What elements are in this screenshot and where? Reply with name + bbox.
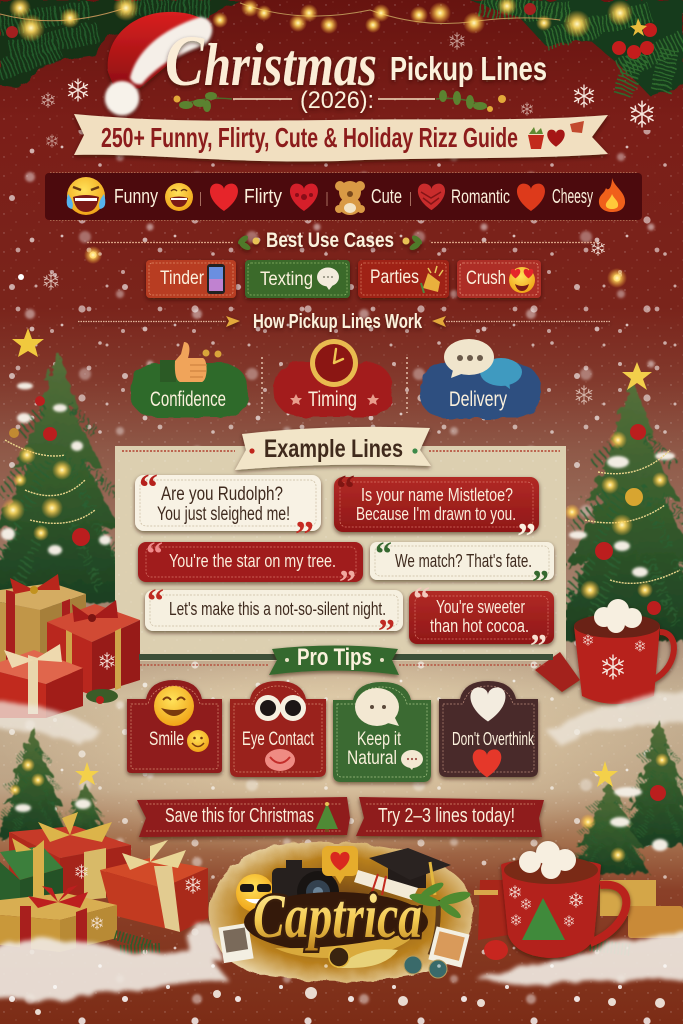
icon: party bell xyxy=(421,266,443,293)
quote card 3: ” xyxy=(339,564,356,601)
icon: eyes xyxy=(255,695,306,721)
gift: gold box xyxy=(0,885,117,952)
ribbon: pro tips heading: Pro Tips xyxy=(297,644,372,671)
ribbon: example lines heading xyxy=(235,427,431,470)
small trees: left xyxy=(0,726,108,842)
gifts: middle left xyxy=(0,574,140,718)
quote card 3: “ xyxy=(146,536,163,573)
ribbon: pro tips heading xyxy=(269,644,399,675)
quote card 2: Is your name Mistletoe? xyxy=(361,485,513,505)
label: flirty: Flirty xyxy=(244,186,282,208)
icon: small chat bubble xyxy=(401,750,423,770)
heading: best use cases: Best Use Cases xyxy=(266,229,394,252)
heading: best use cases xyxy=(87,229,597,252)
icon: diploma xyxy=(354,870,418,900)
quote card 1: Are you Rudolph? xyxy=(161,484,283,505)
snow: bottom xyxy=(0,920,683,1001)
gift: red box xyxy=(47,600,140,695)
button: parties: Parties xyxy=(370,267,419,288)
icon: teddy bear xyxy=(335,181,365,215)
mug: middle right xyxy=(535,599,674,704)
button: crush: Crush xyxy=(466,268,506,289)
icon: tree star xyxy=(75,762,99,785)
gift: front red box xyxy=(0,644,83,718)
quote card 6: You're sweeter xyxy=(436,597,525,617)
icon: small smiley xyxy=(187,730,209,752)
gift: gold box xyxy=(0,574,86,665)
logo: captrica xyxy=(210,842,473,981)
icon: tree star xyxy=(12,328,44,357)
icon: grin xyxy=(165,183,193,211)
tip: smile: Smile xyxy=(149,729,184,750)
label: funny: Funny xyxy=(114,186,158,208)
garland: top left xyxy=(0,0,240,88)
quote card 2: “ xyxy=(336,468,355,510)
label: timing: Timing xyxy=(308,388,357,411)
tip: don't overthink: Don't Overthink xyxy=(452,729,535,749)
panel: timing xyxy=(274,339,393,417)
snow drifts: middle xyxy=(0,690,683,745)
category bar xyxy=(45,172,642,220)
heading: how pickup lines work: How Pickup Lines Work xyxy=(253,311,423,333)
icon: palm tree xyxy=(408,880,472,955)
panel: example lines xyxy=(115,427,566,665)
call to action ribbons xyxy=(137,797,544,837)
button: crush xyxy=(457,260,541,298)
icon: sunglasses xyxy=(404,956,447,978)
ribbon: try lines xyxy=(356,797,544,837)
quote card 2: Because I'm drawn to you. xyxy=(356,504,516,524)
icon: mini tree xyxy=(316,802,338,832)
quote card 2: ” xyxy=(517,516,536,558)
tip: keep it natural: Natural xyxy=(347,748,397,769)
icon: tree star xyxy=(622,362,652,390)
gift: red box xyxy=(9,812,131,900)
ribbon: try lines: Try 2–3 lines today! xyxy=(378,805,515,827)
icon: mug tree xyxy=(522,898,565,940)
title: Christmas xyxy=(165,21,377,101)
label: romantic: Romantic xyxy=(451,187,510,208)
tip: don't overthink xyxy=(439,681,538,777)
icon: lips xyxy=(265,749,295,771)
small trees: right xyxy=(570,720,683,874)
icon: photo left xyxy=(218,923,254,963)
strawberry xyxy=(484,940,508,960)
quote card 3 xyxy=(138,536,363,601)
quote card 3: You're the star on my tree. xyxy=(169,551,336,571)
icon: heart-eyes face xyxy=(509,267,535,293)
title xyxy=(165,21,547,114)
button: tinder: Tinder xyxy=(160,268,205,289)
title sprigs xyxy=(174,90,506,112)
quote card 4: We match? That's fate. xyxy=(395,551,532,571)
icon: speech bubbles xyxy=(444,339,522,389)
button: tinder xyxy=(146,260,236,298)
how it works: dividers xyxy=(262,357,407,413)
icon: swoosh xyxy=(275,930,420,958)
use case buttons xyxy=(146,260,541,298)
quote card 6: ” xyxy=(530,628,547,665)
quote card 5 xyxy=(145,583,403,650)
icon: knitted heart xyxy=(418,184,445,210)
gifts: bottom right xyxy=(474,880,683,950)
icon: photo right xyxy=(428,926,470,968)
ribbon: example lines heading: Example Lines xyxy=(264,435,403,463)
panel: confidence xyxy=(130,342,248,418)
icon: chat bubble xyxy=(317,268,339,290)
title: (2026): xyxy=(300,87,374,114)
tip: smile xyxy=(127,680,222,773)
string lights xyxy=(212,0,560,34)
title: Pickup Lines xyxy=(390,50,547,87)
gifts: bottom left xyxy=(0,812,208,952)
icon: tree star xyxy=(592,761,618,787)
panel: delivery xyxy=(419,339,541,418)
icon: thumbs up xyxy=(160,342,222,382)
icon: heart speech bubble xyxy=(322,846,358,884)
tip: eye contact xyxy=(230,681,326,777)
icon: sunglasses emoji xyxy=(236,874,274,912)
gift: green box xyxy=(0,838,63,902)
button: parties xyxy=(358,260,449,298)
icon: patterned heart xyxy=(290,184,318,211)
quote card 6: “ xyxy=(413,581,430,618)
quote card 6: than hot cocoa. xyxy=(430,616,529,636)
logo wordmark: Captrica xyxy=(253,883,422,951)
quote card 4 xyxy=(370,536,554,601)
panel: delivery: Delivery xyxy=(449,388,507,411)
icon: red heart xyxy=(473,749,501,777)
icon: camera xyxy=(272,860,339,913)
tip: eye contact: Eye Contact xyxy=(242,729,315,750)
tip: keep it natural xyxy=(333,682,431,782)
icon: banner gifts xyxy=(528,121,584,149)
icon: laughing face xyxy=(67,177,105,215)
quote card 1: “ xyxy=(139,467,158,509)
santa hat xyxy=(105,12,212,115)
ribbon: save this xyxy=(137,797,350,837)
quote card 4: “ xyxy=(375,536,392,573)
big tree: left xyxy=(0,328,134,603)
mug: bottom right xyxy=(501,841,626,958)
quote card 6 xyxy=(409,581,554,665)
icon: phone xyxy=(207,264,225,294)
icon: feather xyxy=(337,949,398,968)
quote card 5: ” xyxy=(378,613,395,650)
label: cute: Cute xyxy=(371,186,402,208)
ribbon: save this: Save this for Christmas xyxy=(165,805,314,827)
button: texting: Texting xyxy=(260,269,313,290)
label: cheesy: Cheesy xyxy=(552,186,593,208)
quote card 5: Let's make this a not-so-silent night. xyxy=(169,599,386,619)
button: texting xyxy=(245,260,350,298)
panel: confidence: Confidence xyxy=(150,388,226,411)
quote card 1 xyxy=(135,467,321,556)
quote card 5: “ xyxy=(147,583,164,620)
icon: clock xyxy=(310,339,358,387)
band: pro tips xyxy=(139,644,553,675)
tip: keep it natural: Keep it xyxy=(357,729,402,750)
wordmark backing xyxy=(244,892,428,952)
quote card 1: You just sleighed me! xyxy=(157,504,290,525)
icon: graduation cap xyxy=(369,848,451,895)
gift: orange box xyxy=(100,840,208,932)
subtitle banner xyxy=(74,114,608,162)
quote card 4: ” xyxy=(532,564,549,601)
big tree: right xyxy=(553,362,683,641)
icon: white heart xyxy=(471,687,505,722)
quote card 1: ” xyxy=(295,514,314,556)
icon: flame xyxy=(599,178,625,212)
icon: aperture xyxy=(329,947,349,967)
quote card 2 xyxy=(334,468,539,558)
icon: smiley xyxy=(154,686,194,726)
garland: top right xyxy=(470,0,683,96)
heading: how pickup lines work xyxy=(78,311,610,333)
foreground snow dots xyxy=(0,960,683,1024)
icon: orange heart xyxy=(517,184,545,211)
icon: red heart xyxy=(210,184,238,211)
icon: chat bubble xyxy=(355,688,399,726)
